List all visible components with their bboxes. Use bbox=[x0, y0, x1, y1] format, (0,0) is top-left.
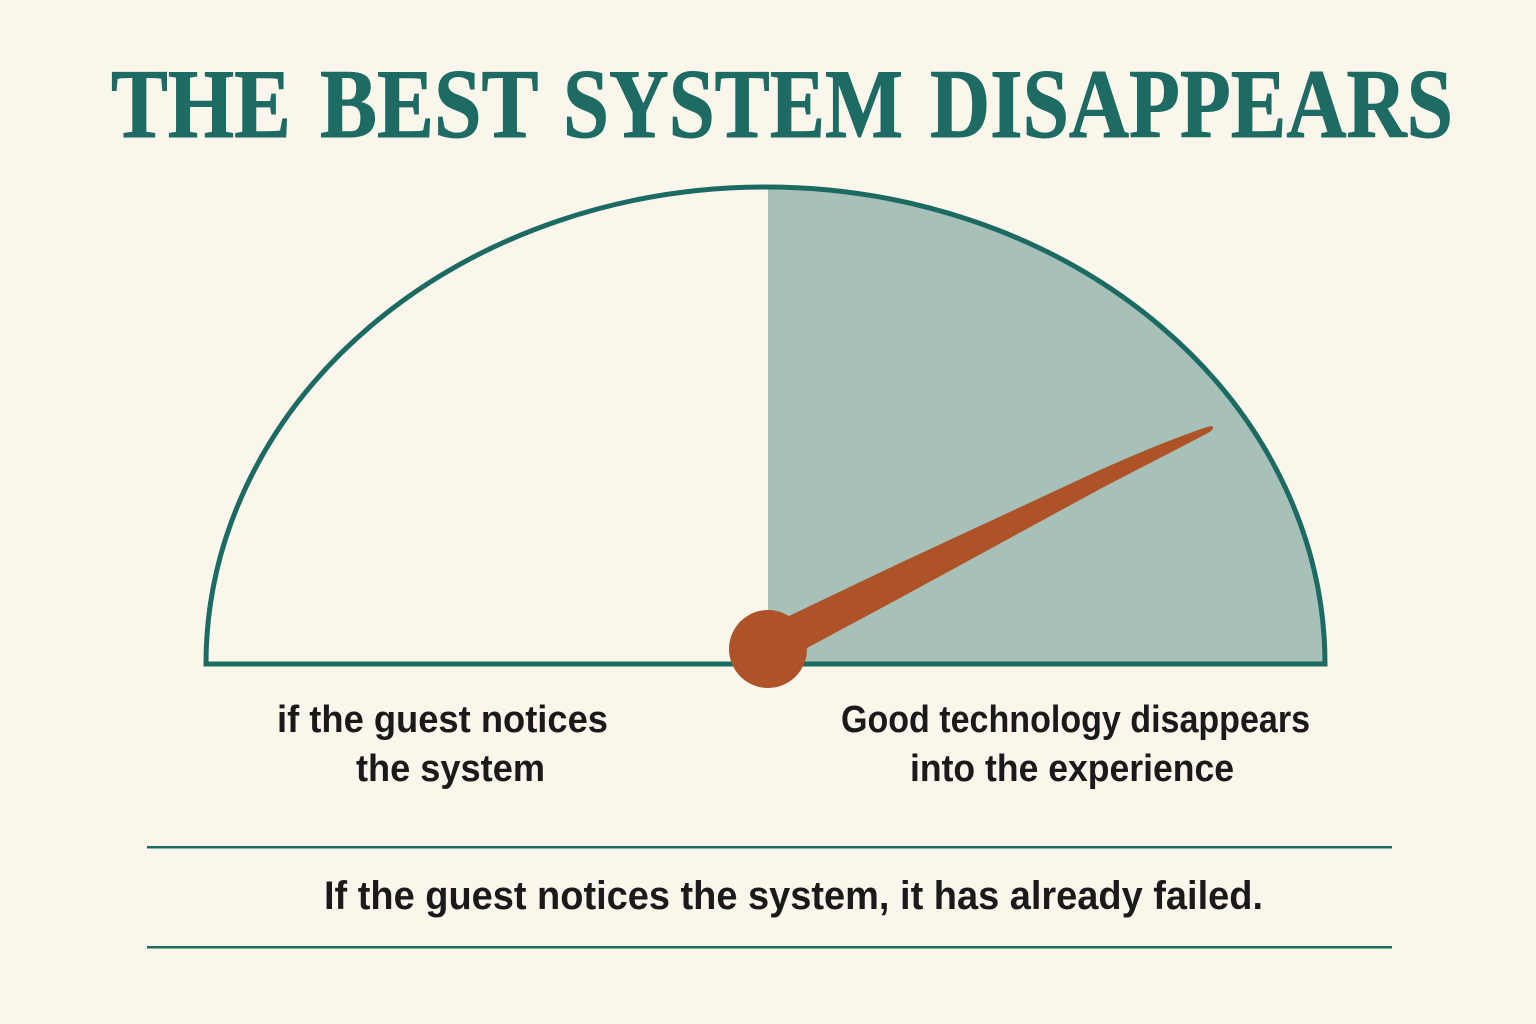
gauge bbox=[206, 187, 1325, 688]
divider bottom bbox=[147, 946, 1392, 948]
left gauge label: the system bbox=[356, 748, 545, 790]
right gauge label: into the experience bbox=[910, 748, 1234, 790]
right gauge label: Good technology disappears bbox=[841, 699, 1310, 741]
gauge: semicircle outline bbox=[206, 187, 1325, 664]
divider top bbox=[147, 846, 1392, 848]
gauge: needle bbox=[729, 426, 1213, 688]
left gauge label: if the guest notices bbox=[277, 699, 608, 741]
title: BEST bbox=[320, 50, 538, 159]
title: THE bbox=[111, 50, 291, 159]
title: DISAPPEARS bbox=[930, 50, 1453, 159]
gauge: shaded right quadrant bbox=[768, 187, 1325, 664]
title: SYSTEM bbox=[563, 50, 903, 159]
needle hub bbox=[729, 610, 807, 688]
conclusion statement: If the guest notices the system, it has already failed. bbox=[324, 874, 1263, 918]
needle pointer bbox=[789, 426, 1213, 648]
